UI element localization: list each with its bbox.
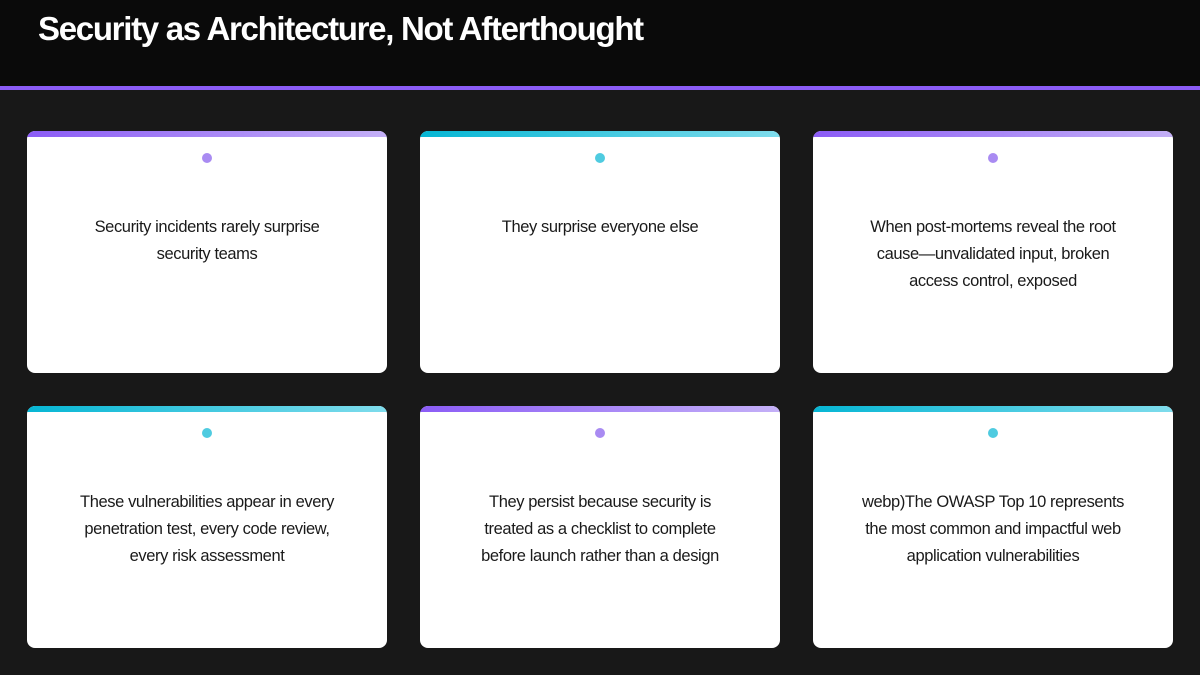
card 3 (813, 131, 1173, 373)
card 1 text: security teams (157, 245, 257, 263)
card 6 text: application vulnerabilities (907, 547, 1079, 565)
card 1 text: Security incidents rarely surprise (95, 218, 319, 236)
card 5 text: before launch rather than a design (481, 547, 719, 565)
card 3 text (870, 218, 1116, 290)
card 6 text: webp)The OWASP Top 10 represents (862, 493, 1124, 511)
card 4 text: every risk assessment (130, 547, 284, 565)
card 2 text: They surprise everyone else (502, 218, 698, 236)
card 5 text: They persist because security is (489, 493, 711, 511)
card 4 text: These vulnerabilities appear in every (80, 493, 334, 511)
card 5 (420, 406, 780, 648)
card 2 (420, 131, 780, 373)
card 6 (813, 406, 1173, 648)
card 3 text: When post-mortems reveal the root (870, 218, 1116, 236)
card 1 text (95, 218, 320, 263)
card 6 text: the most common and impactful web (865, 520, 1121, 538)
header bar (0, 0, 1200, 86)
card 3 text: cause—unvalidated input, broken (877, 245, 1109, 263)
card 5 text (481, 493, 719, 565)
card 3 text: access control, exposed (909, 272, 1077, 290)
card 4 (27, 406, 387, 648)
accent line (0, 86, 1200, 90)
card 6 text (862, 493, 1124, 565)
card 1 (27, 131, 387, 373)
card 4 text: penetration test, every code review, (84, 520, 330, 538)
title: Security as Architecture, Not Afterthought (38, 10, 643, 47)
card 4 text (80, 493, 334, 565)
card 5 text: treated as a checklist to complete (484, 520, 716, 538)
